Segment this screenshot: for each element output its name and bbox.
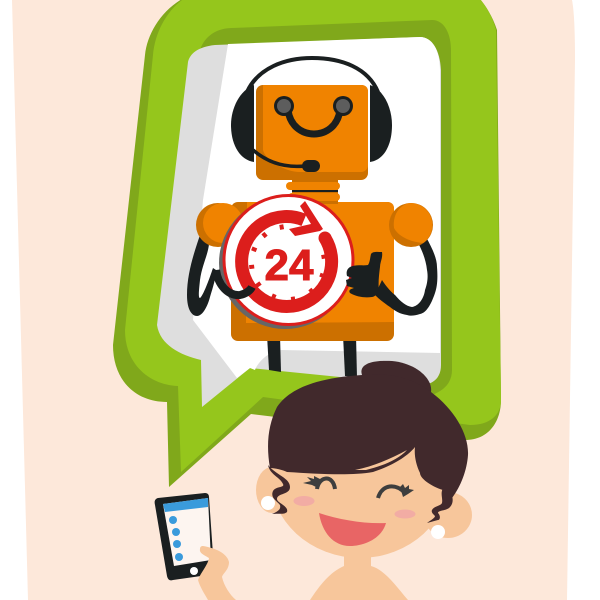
badge disc xyxy=(224,196,353,324)
bubble grey inner xyxy=(157,37,441,407)
woman hair xyxy=(268,374,468,498)
robot xyxy=(187,58,437,378)
woman face xyxy=(270,392,450,558)
headset microphone xyxy=(253,150,320,172)
robot legs xyxy=(267,335,357,378)
robot neck xyxy=(286,178,340,204)
robot head xyxy=(256,85,368,180)
badge shadow xyxy=(219,197,351,329)
woman right curl xyxy=(427,488,453,523)
phone list dots xyxy=(169,516,183,561)
phone home button xyxy=(190,567,198,575)
phone body xyxy=(155,493,214,580)
robot left hand xyxy=(216,270,252,295)
woman left curl xyxy=(268,465,290,514)
bubble white inner xyxy=(193,37,440,378)
phone header xyxy=(163,498,208,512)
robot body xyxy=(231,202,394,341)
robot eyes xyxy=(274,96,353,116)
woman hair highlight xyxy=(355,450,407,470)
robot right shoulder xyxy=(389,203,433,247)
woman shoulders xyxy=(310,550,408,600)
phone xyxy=(155,493,214,580)
woman cheeks xyxy=(294,496,416,518)
bubble shadow xyxy=(113,0,501,487)
woman left eye xyxy=(303,476,335,489)
headset ear cups xyxy=(231,85,392,162)
woman right eye xyxy=(378,484,414,498)
robot left arm xyxy=(187,232,216,316)
woman ears xyxy=(256,467,472,538)
clock ticks xyxy=(249,225,326,302)
headset band xyxy=(247,58,378,92)
clock arrow head xyxy=(289,201,323,236)
speech bubble xyxy=(113,0,501,487)
woman earrings xyxy=(261,496,445,539)
woman hand holding phone xyxy=(198,546,236,600)
robot smile xyxy=(288,110,340,134)
clock ring rounded end xyxy=(318,232,332,244)
woman hair bun xyxy=(361,361,431,395)
robot right arm xyxy=(375,237,437,316)
clock number 24: 24 xyxy=(265,241,314,290)
robot left shoulder xyxy=(196,203,243,247)
phone screen xyxy=(163,498,211,566)
woman mouth xyxy=(319,513,386,546)
clock ring xyxy=(242,217,332,307)
bubble face xyxy=(125,0,501,472)
woman xyxy=(155,361,472,600)
bubble inner shade xyxy=(200,20,452,395)
robot thumbs up hand xyxy=(346,252,382,297)
24 hour clock badge xyxy=(219,196,353,329)
